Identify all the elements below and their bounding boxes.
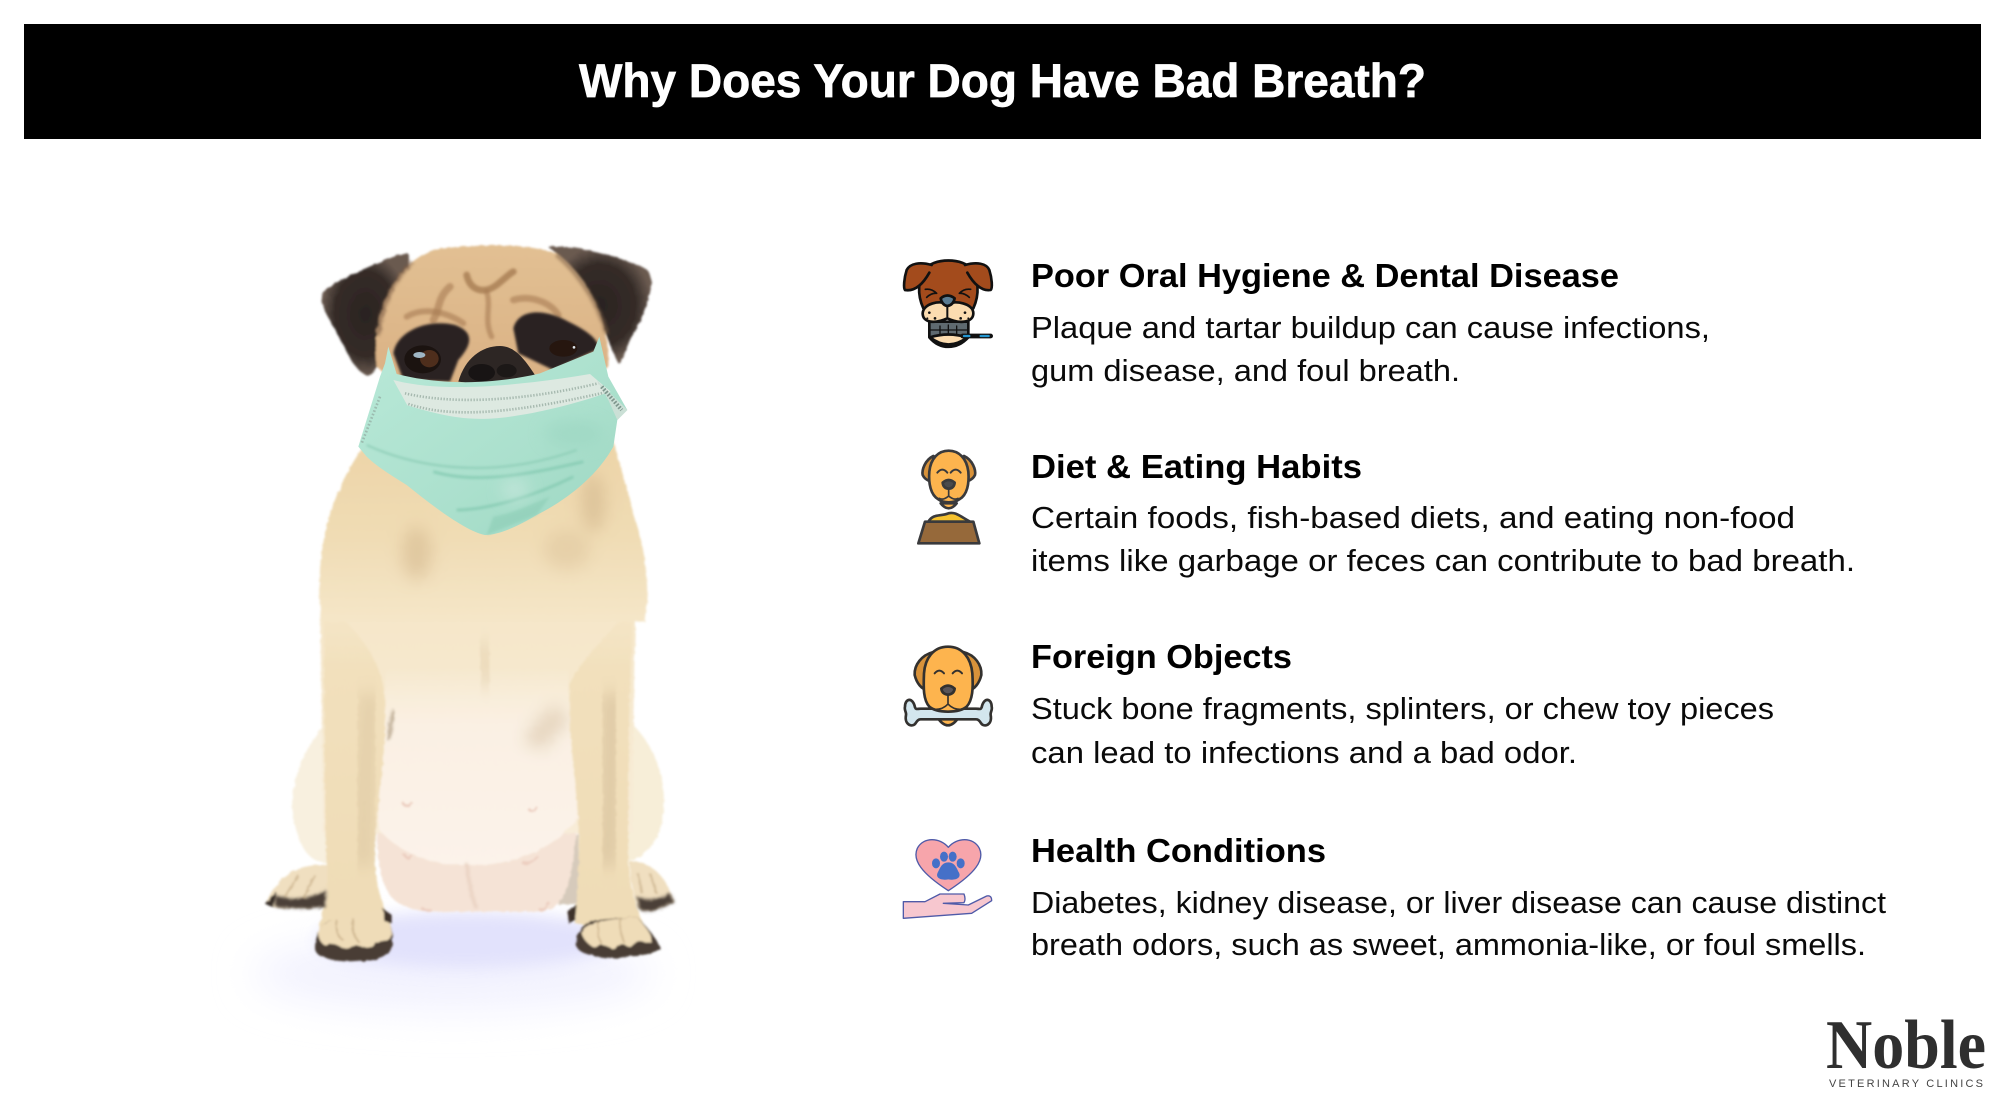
text block: foreign objects: can lead to infections and a bad odor. bbox=[1031, 735, 1577, 770]
icon: paw heart over a hand bbox=[903, 840, 992, 918]
body: Stuck bone fragments, splinters, or chew toy pieces bbox=[1031, 691, 1774, 726]
text block: diet bbox=[1031, 448, 1855, 578]
icon: dog holding a bone bbox=[905, 647, 992, 725]
text block: foreign objects bbox=[1031, 638, 1774, 770]
text block: poor oral hygiene bbox=[1031, 257, 1710, 388]
heading: Poor Oral Hygiene & Dental Disease bbox=[1031, 257, 1619, 294]
heading: Foreign Objects bbox=[1031, 638, 1292, 675]
body: Diabetes, kidney disease, or liver disease can cause distinct bbox=[1031, 885, 1886, 920]
text block: diet: items like garbage or feces can contribute to bad breath. bbox=[1031, 543, 1855, 578]
title: Why Does Your Dog Have Bad Breath? bbox=[579, 54, 1426, 107]
body: Plaque and tartar buildup can cause infections, bbox=[1031, 310, 1710, 345]
title banner bbox=[24, 24, 1981, 139]
heading: Health Conditions bbox=[1031, 832, 1326, 869]
text block: poor oral hygiene: gum disease, and foul breath. bbox=[1031, 353, 1460, 388]
floor shadow bbox=[253, 912, 653, 1010]
surgical mask bbox=[358, 337, 627, 535]
icon: dog with food bowl bbox=[918, 451, 979, 543]
logo: Noble Veterinary Clinics: VETERINARY CLINICS bbox=[1829, 1078, 1983, 1090]
pug face detail bbox=[393, 272, 600, 386]
body: Certain foods, fish-based diets, and eating non-food bbox=[1031, 500, 1795, 535]
pug body bbox=[265, 245, 674, 961]
icon: dog brushing its teeth bbox=[904, 260, 992, 347]
logo: Noble Veterinary Clinics: Noble bbox=[1826, 1007, 1986, 1084]
photo: pug wearing a surgical mask bbox=[253, 245, 674, 1010]
text block: health conditions bbox=[1031, 832, 1886, 962]
heading: Diet & Eating Habits bbox=[1031, 448, 1362, 485]
text block: health conditions: breath odors, such as sweet, ammonia-like, or foul smells. bbox=[1031, 927, 1866, 962]
